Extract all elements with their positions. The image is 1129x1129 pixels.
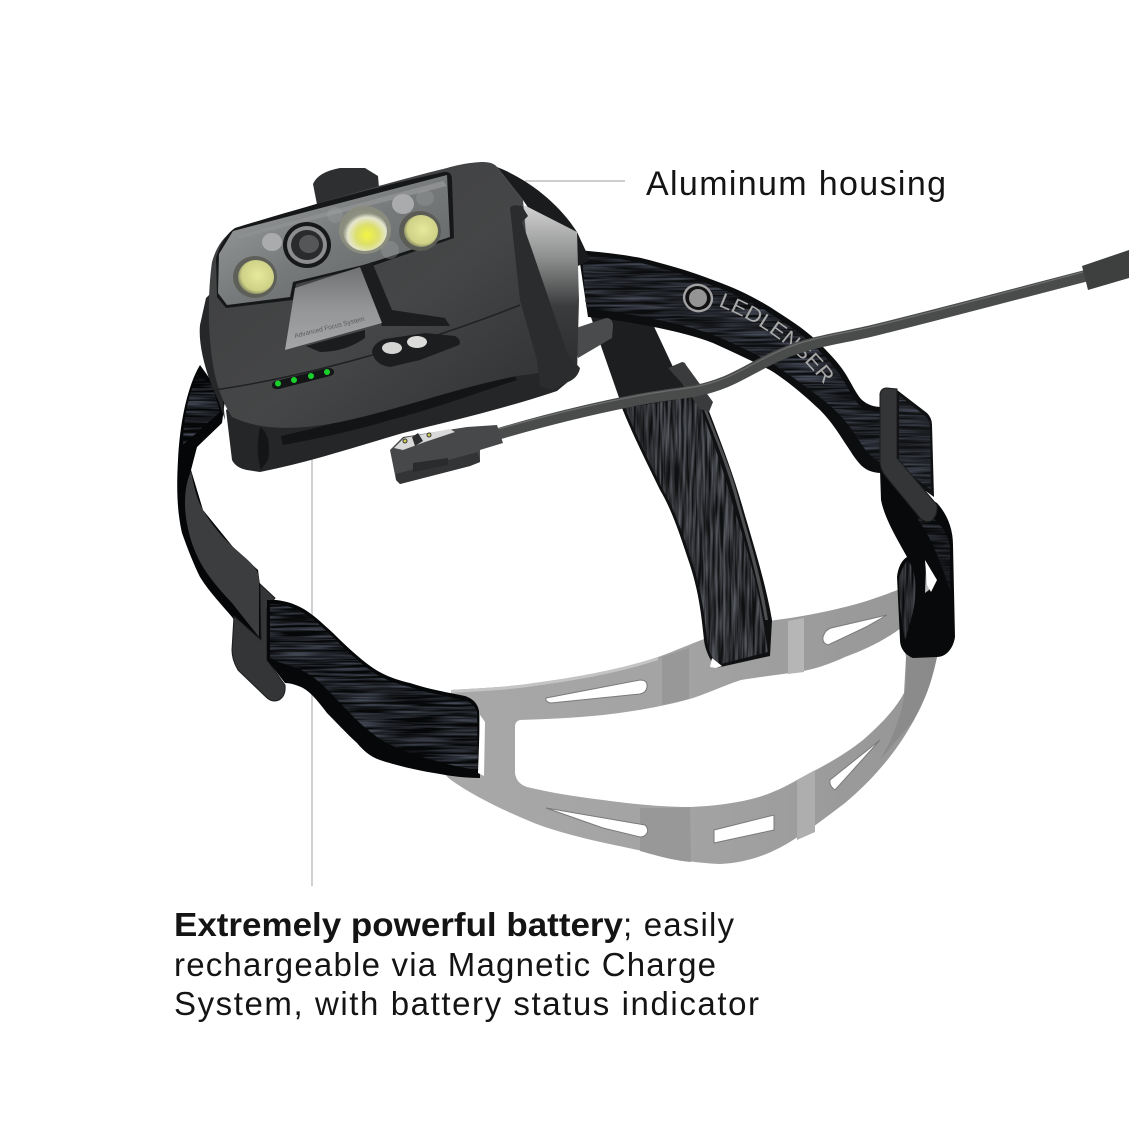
left strap with solid back panel	[177, 365, 262, 660]
band heather texture	[582, 255, 882, 463]
label: aluminum housing: Aluminum housing	[646, 165, 946, 203]
label: battery description	[174, 906, 759, 1022]
bracket side	[515, 205, 579, 390]
front bracket rim	[510, 205, 580, 390]
right rear strap behind buckle	[897, 390, 934, 497]
rear bracket and top knob	[313, 168, 380, 220]
LEDLENSER logo	[682, 284, 833, 384]
left buckle	[232, 584, 285, 701]
slot by left strap	[478, 715, 485, 776]
lower shell	[226, 372, 575, 472]
centre yellow LED	[339, 206, 391, 254]
leader line: aluminum housing	[525, 180, 625, 182]
LEDLENSER logo: LEDLENSER	[720, 293, 833, 384]
left heather strap	[267, 600, 480, 778]
window bezel	[216, 172, 454, 308]
focus slider	[285, 262, 450, 350]
bracket strap loop	[570, 318, 613, 358]
label: battery description: ; easily	[623, 906, 734, 943]
right strap twist	[880, 470, 955, 658]
headlamp	[200, 162, 590, 472]
window top highlight	[236, 181, 447, 238]
small strap buckle	[668, 362, 713, 412]
right LED	[399, 211, 441, 251]
leader line: battery	[311, 455, 313, 886]
left LED	[233, 256, 277, 298]
left bracket	[200, 293, 225, 420]
magnetic connector	[390, 425, 503, 484]
focus slider: Advanced Focus System	[294, 316, 366, 340]
right rear heather	[899, 395, 931, 490]
focus wheel	[306, 330, 365, 352]
magnetic charging cable	[390, 250, 1129, 484]
rear grey head frame	[443, 589, 937, 864]
dark centre lens	[283, 222, 331, 268]
frame shading panels	[451, 618, 937, 862]
small grey indicator circles	[262, 190, 434, 259]
label: battery description: Extremely powerful battery	[174, 906, 624, 943]
battery status indicator	[272, 368, 334, 389]
button pad	[372, 333, 460, 367]
lens window	[218, 175, 450, 305]
dark inner contour	[214, 305, 520, 390]
label: battery description: rechargeable via Magnetic Charge	[174, 946, 716, 983]
frame slots	[546, 615, 887, 843]
right head strap band	[580, 250, 882, 473]
cross strap	[585, 300, 772, 668]
right buckle	[880, 388, 937, 522]
main body	[209, 162, 546, 428]
label: battery description: System, with battery status indicator	[174, 985, 759, 1022]
